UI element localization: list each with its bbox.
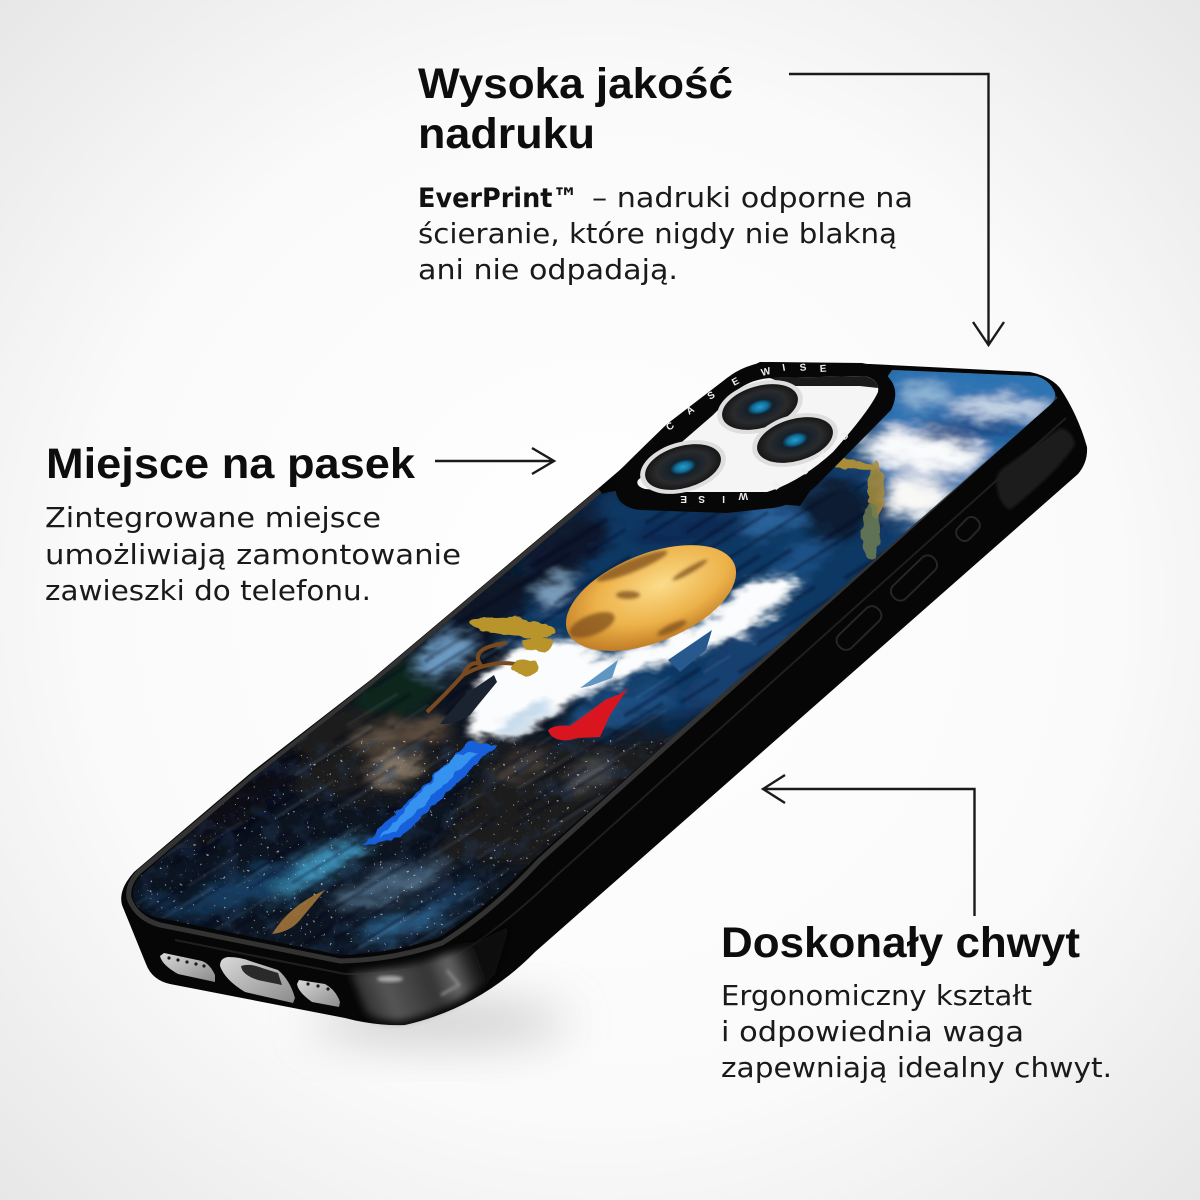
text block: print quality: ścieranie, które nigdy nie blakną — [418, 217, 897, 250]
heading: print quality: Wysoka jakość — [418, 60, 733, 108]
golden moss on cliff — [835, 458, 885, 560]
charging port and speakers — [160, 953, 340, 1007]
case body — [121, 362, 1087, 1025]
ring lettering — [664, 362, 850, 504]
lenses — [634, 371, 844, 503]
phone case illustration — [110, 350, 1090, 1042]
right speaker — [297, 980, 340, 1007]
ring lettering: CASE — [664, 376, 742, 433]
arrow: print quality to case — [789, 74, 1004, 345]
ring lettering: WISE — [760, 362, 827, 379]
mottled shadow texture — [140, 740, 650, 954]
text block: print quality: EverPrint™ — [418, 183, 578, 214]
text block: print quality: – nadruki odporne na — [592, 181, 913, 214]
text block: print quality — [418, 181, 913, 286]
paint stroke texture — [130, 470, 885, 960]
text block: strap slot: zawieszki do telefonu. — [45, 574, 371, 607]
camera window — [637, 376, 878, 492]
bezel around artwork — [129, 396, 1056, 961]
text block: grip: i odpowiednia waga — [721, 1015, 1024, 1048]
drop shadow — [310, 1002, 570, 1042]
red figure — [548, 688, 628, 740]
moon — [566, 545, 736, 651]
sky — [875, 360, 1065, 500]
text block: strap slot: Zintegrowane miejsce — [45, 501, 381, 534]
arrow: strap slot — [435, 448, 554, 474]
heading: print quality: nadruku — [418, 110, 595, 158]
rocks — [290, 705, 470, 800]
text block: grip — [721, 979, 1112, 1084]
orange fin detail — [272, 890, 325, 934]
side buttons — [833, 514, 983, 653]
text block: strap slot: umożliwiają zamontowanie — [45, 538, 461, 571]
strap slot hump — [996, 428, 1075, 510]
ring lettering: CASE — [770, 429, 850, 492]
left trees dark — [352, 648, 449, 717]
heading: print quality — [418, 60, 733, 158]
text block: grip: Ergonomiczny kształt — [721, 979, 1032, 1012]
waterfall — [362, 742, 497, 846]
text block: print quality: ani nie odpadają. — [418, 253, 678, 286]
artwork on the case — [110, 350, 1090, 970]
painted clouds and rocks — [142, 360, 1065, 949]
specks of paint — [130, 740, 690, 960]
tree — [427, 613, 557, 712]
heading: grip: Doskonały chwyt — [721, 919, 1080, 967]
ring lettering: WISE — [680, 490, 748, 504]
heading: strap slot: Miejsce na pasek — [46, 440, 415, 488]
left speaker — [160, 953, 215, 982]
teal water — [255, 827, 375, 909]
glossy corner highlight — [350, 925, 510, 1021]
text block: grip: zapewniają idealny chwyt. — [721, 1051, 1112, 1084]
usb port — [220, 957, 295, 1003]
blue peaks — [580, 630, 712, 688]
dark cloaked figure — [440, 675, 497, 724]
camera ring — [616, 362, 895, 513]
dark deep-blue clouds — [480, 470, 885, 720]
arrow: grip — [763, 775, 974, 916]
white mist swath — [468, 575, 803, 743]
text block: strap slot — [45, 501, 461, 607]
